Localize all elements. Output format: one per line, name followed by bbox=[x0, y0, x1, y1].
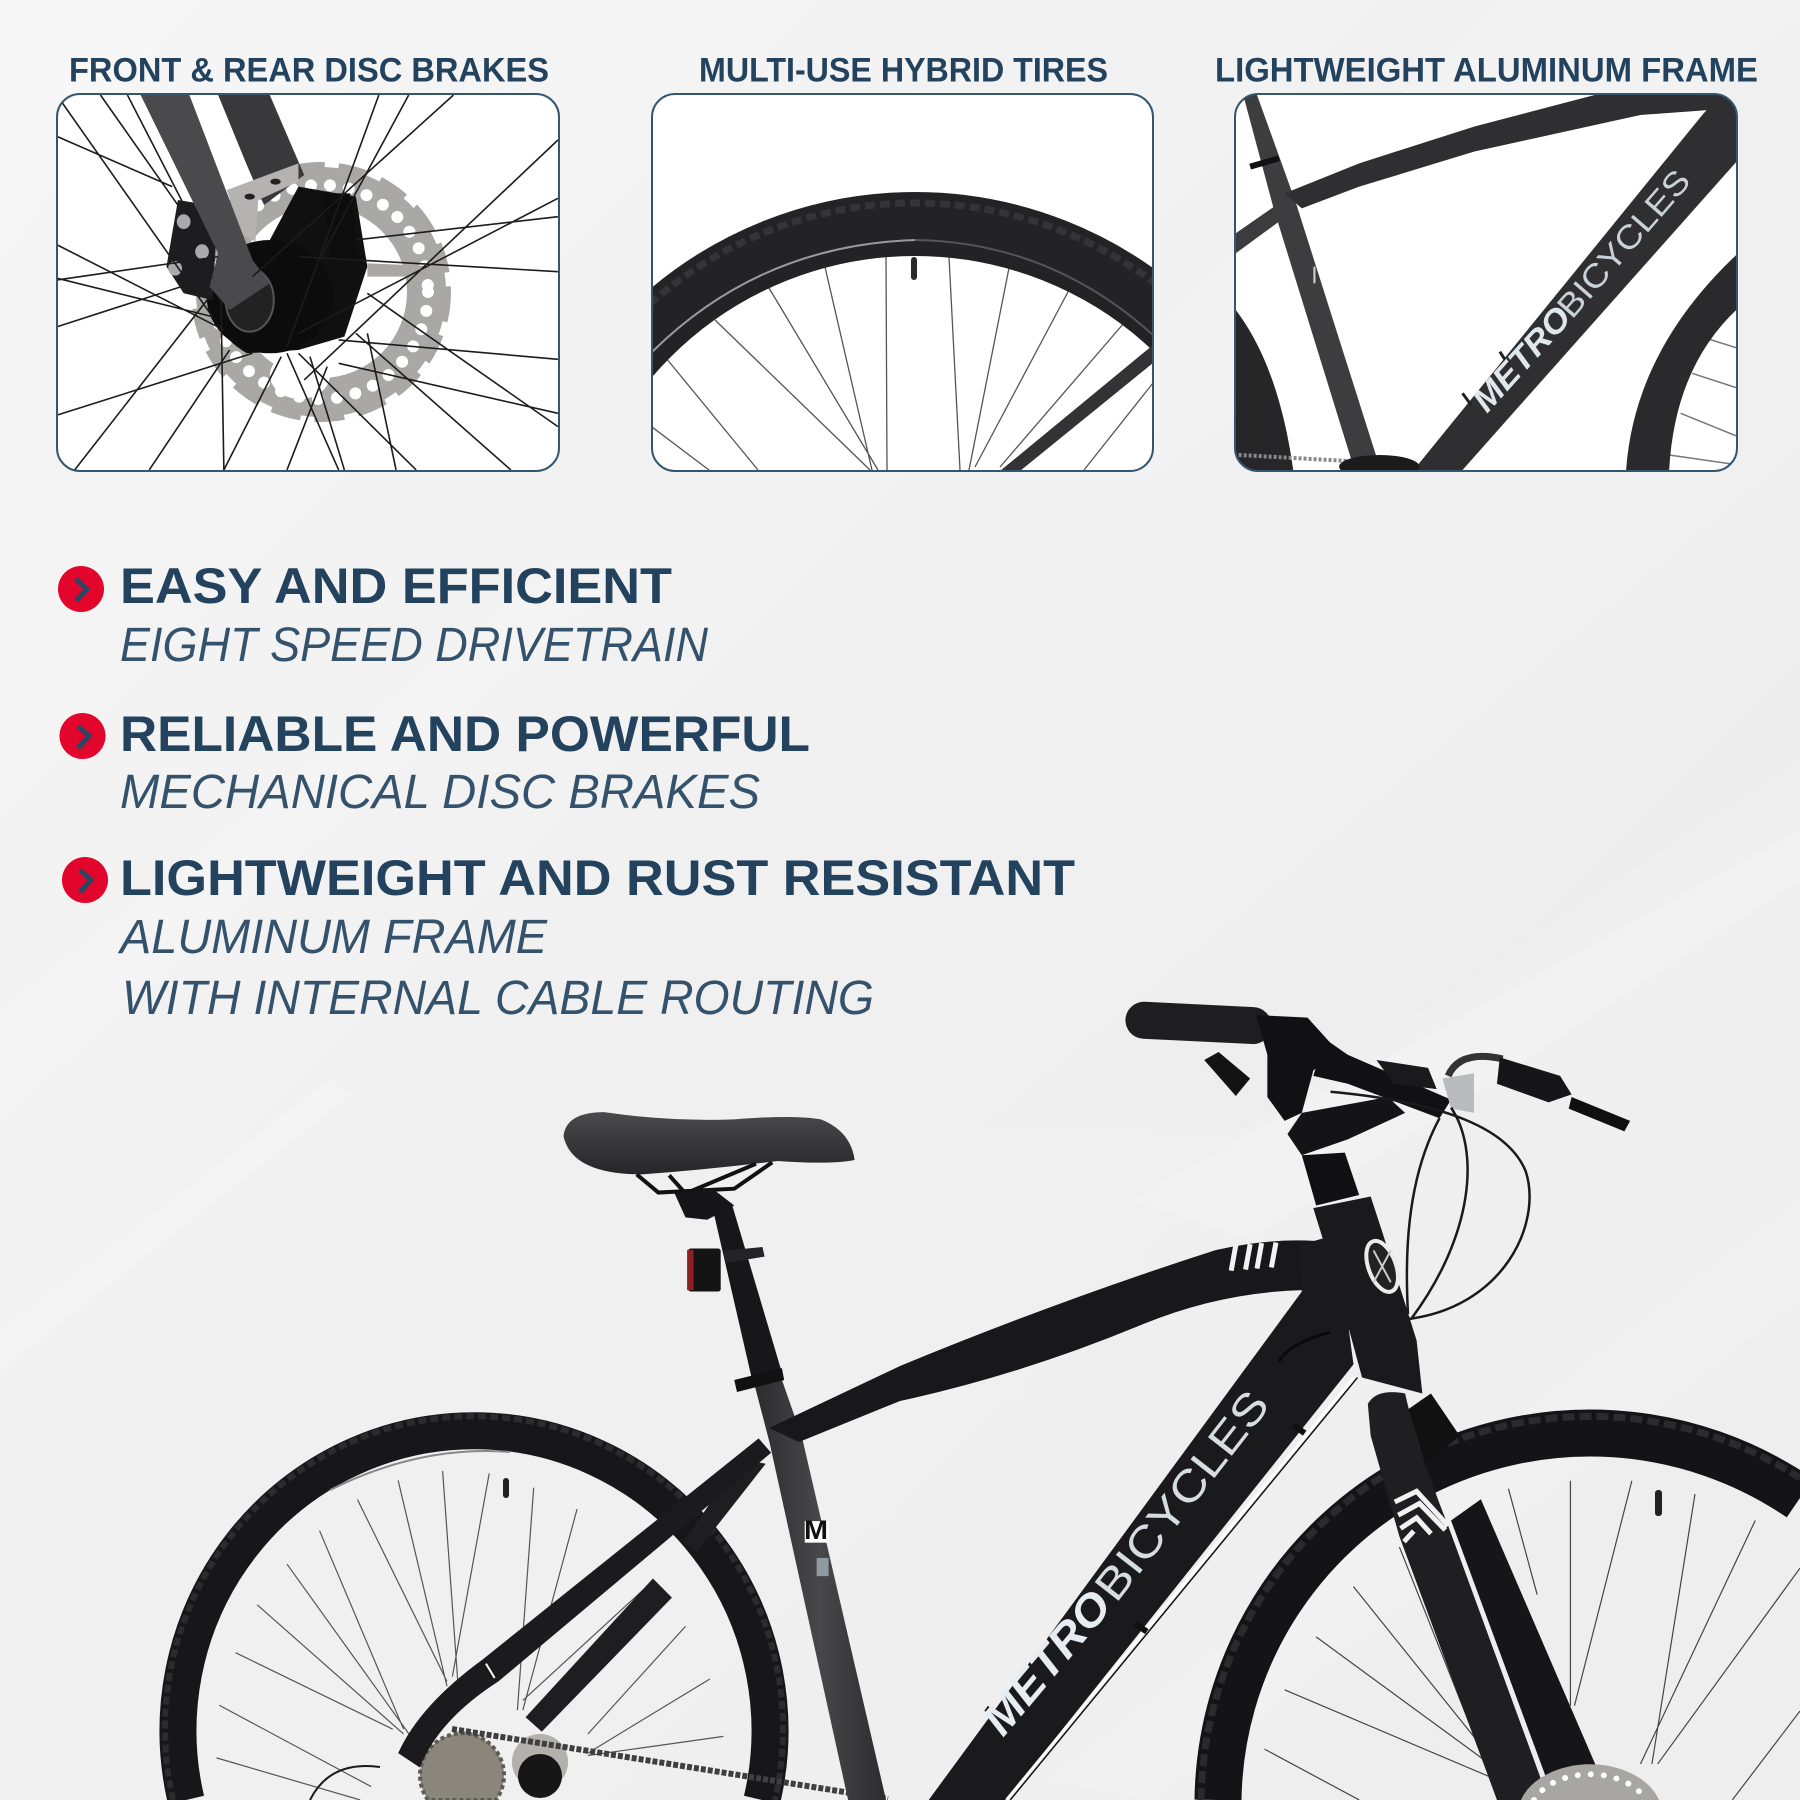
feature 2: reliable and powerful: RELIABLE AND POWERFUL bbox=[120, 706, 810, 762]
frame: top tube bbox=[769, 1240, 1316, 1442]
frame logo text bbox=[1465, 162, 1697, 419]
feature 3: lightweight and rust resistant: LIGHTWEIGHT AND RUST RESISTANT bbox=[120, 850, 1075, 906]
frame logo text: METRO bbox=[1465, 299, 1578, 419]
caption: lightweight aluminum frame: LIGHTWEIGHT ALUMINUM FRAME bbox=[1215, 52, 1758, 90]
feature 2: reliable and powerful: MECHANICAL DISC BRAKES bbox=[120, 766, 760, 819]
feature 2: reliable and powerful bbox=[60, 706, 810, 819]
bicycle illustration bbox=[165, 1015, 1800, 1800]
down tube logo: BICYCLES bbox=[1085, 1381, 1279, 1610]
feature 1: easy and efficient bbox=[58, 558, 708, 672]
frame sticker letter: M bbox=[804, 1515, 828, 1545]
feature 3: lightweight and rust resistant: WITH INTERNAL CABLE ROUTING bbox=[122, 972, 874, 1025]
frame: head tube, down tube, fork, handlebars bbox=[929, 1015, 1630, 1800]
panel: hybrid tire photo bbox=[651, 93, 1154, 472]
caption: multi-use hybrid tires: MULTI-USE HYBRID TIRES bbox=[699, 52, 1108, 90]
panel: aluminum frame photo bbox=[1235, 94, 1738, 478]
frame: rear triangle and seat tube bbox=[398, 1112, 886, 1800]
down tube logo bbox=[973, 1381, 1279, 1744]
down tube logo: METRO bbox=[973, 1581, 1121, 1744]
frame logo text: BICYCLES bbox=[1549, 162, 1697, 325]
front wheel bbox=[1201, 1416, 1800, 1800]
drivetrain: cassette, chain, brake bbox=[310, 1729, 888, 1800]
rear wheel bbox=[165, 1416, 783, 1800]
caption: front and rear disc brakes: FRONT & REAR DISC BRAKES bbox=[69, 52, 549, 90]
panel: disc brake photo bbox=[57, 94, 559, 471]
feature 1: easy and efficient: EIGHT SPEED DRIVETRAIN bbox=[120, 619, 708, 672]
feature 1: easy and efficient: EASY AND EFFICIENT bbox=[120, 558, 672, 614]
feature 3: lightweight and rust resistant: ALUMINUM FRAME bbox=[117, 911, 548, 964]
feature 3: lightweight and rust resistant bbox=[62, 850, 1075, 1025]
front brake disc bbox=[1521, 1764, 1659, 1800]
